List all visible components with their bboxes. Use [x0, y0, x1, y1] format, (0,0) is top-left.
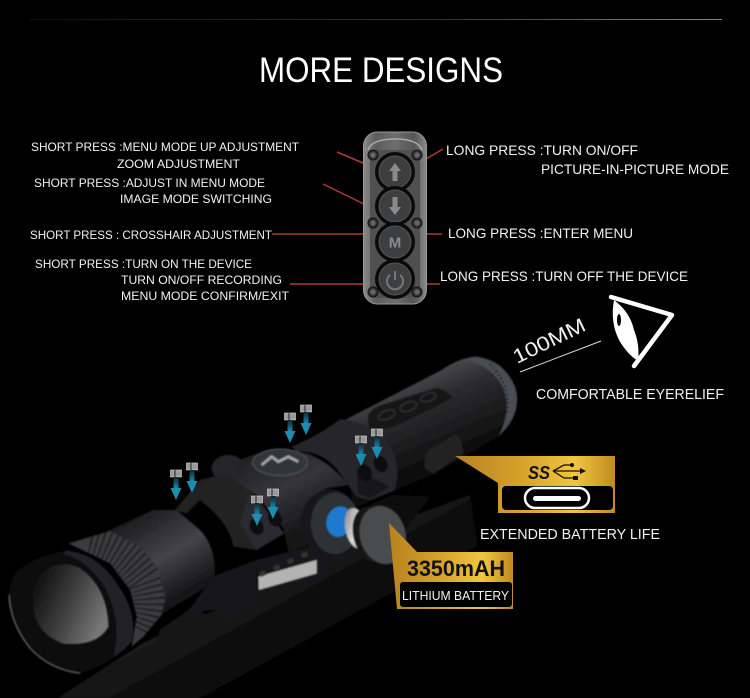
- menu button: M: [389, 234, 401, 252]
- lens housing: [301, 489, 359, 557]
- red leader lines: [272, 149, 443, 284]
- eye relief distance: 100MM: [510, 315, 589, 368]
- battery capacity: 3350mAH: [407, 556, 505, 581]
- eyepiece cap rim: [465, 357, 517, 436]
- knurled focus ring: [68, 530, 166, 646]
- left button descriptions: MENU MODE CONFIRM/EXIT: [121, 289, 290, 303]
- front ring: [175, 473, 284, 550]
- knob bracket: [367, 495, 430, 528]
- objective tube: [107, 510, 215, 613]
- front ring bolts: [247, 508, 285, 537]
- rifle stock: [58, 495, 480, 698]
- left button descriptions: TURN ON/OFF RECORDING: [121, 273, 282, 287]
- title: MORE DESIGNS: [259, 51, 503, 90]
- rail teeth: [260, 550, 315, 575]
- objective section: [9, 473, 285, 673]
- battery callout: [389, 523, 513, 609]
- usb port panel: [502, 486, 613, 510]
- left button descriptions: IMAGE MODE SWITCHING: [120, 192, 272, 206]
- left button descriptions: SHORT PRESS :TURN ON THE DEVICE: [35, 257, 252, 271]
- top divider: [30, 19, 722, 20]
- right button descriptions: LONG PRESS :ENTER MENU: [448, 225, 633, 241]
- rifle scope illustration: [9, 357, 517, 698]
- right button descriptions: LONG PRESS :TURN ON/OFF: [446, 142, 638, 158]
- superspeed usb logo: SS: [528, 463, 550, 483]
- left button descriptions: SHORT PRESS :ADJUST IN MENU MODE: [34, 176, 265, 190]
- usb callout: [455, 456, 615, 513]
- center section: [212, 419, 430, 590]
- objective bezel: [9, 551, 133, 673]
- keypad on tube: [368, 388, 453, 432]
- usb port door: [425, 434, 464, 474]
- rear scope ring: [292, 419, 397, 500]
- left button descriptions: SHORT PRESS : CROSSHAIR ADJUSTMENT: [30, 228, 273, 242]
- eye relief label: COMFORTABLE EYERELIEF: [536, 386, 724, 403]
- battery type: LITHIUM BATTERY: [402, 588, 509, 603]
- right button descriptions: [440, 142, 729, 284]
- battery knob knurl: [347, 503, 397, 567]
- mounting screw arrows: [170, 405, 382, 526]
- button keypad: [364, 132, 426, 304]
- right button descriptions: PICTURE-IN-PICTURE MODE: [541, 161, 729, 177]
- right button descriptions: LONG PRESS :TURN OFF THE DEVICE: [440, 268, 688, 284]
- usb-c icon: [525, 488, 589, 508]
- menu button: [375, 222, 415, 262]
- icon: eye: [611, 297, 672, 366]
- keypad screws: [368, 150, 422, 297]
- left button descriptions: ZOOM ADJUSTMENT: [117, 157, 241, 171]
- up button: [375, 152, 415, 192]
- turret logo: [253, 449, 307, 476]
- side knob: [212, 455, 245, 482]
- turret body: [230, 451, 348, 552]
- down button: [375, 186, 415, 226]
- power button: [375, 259, 415, 299]
- left button descriptions: [30, 140, 300, 303]
- mount base: [157, 607, 213, 640]
- rear ring bolts: [355, 453, 390, 483]
- battery knob face: [353, 501, 412, 569]
- battery life label: EXTENDED BATTERY LIFE: [480, 526, 660, 543]
- blue adjuster: [323, 504, 356, 540]
- eyepiece tube: [342, 357, 517, 520]
- eye relief distance: [510, 315, 601, 372]
- lens glass: [33, 564, 108, 644]
- superspeed usb logo: [528, 463, 586, 483]
- silver ring: [341, 506, 371, 551]
- rail: [257, 547, 330, 590]
- left button descriptions: SHORT PRESS :MENU MODE UP ADJUSTMENT: [31, 140, 300, 154]
